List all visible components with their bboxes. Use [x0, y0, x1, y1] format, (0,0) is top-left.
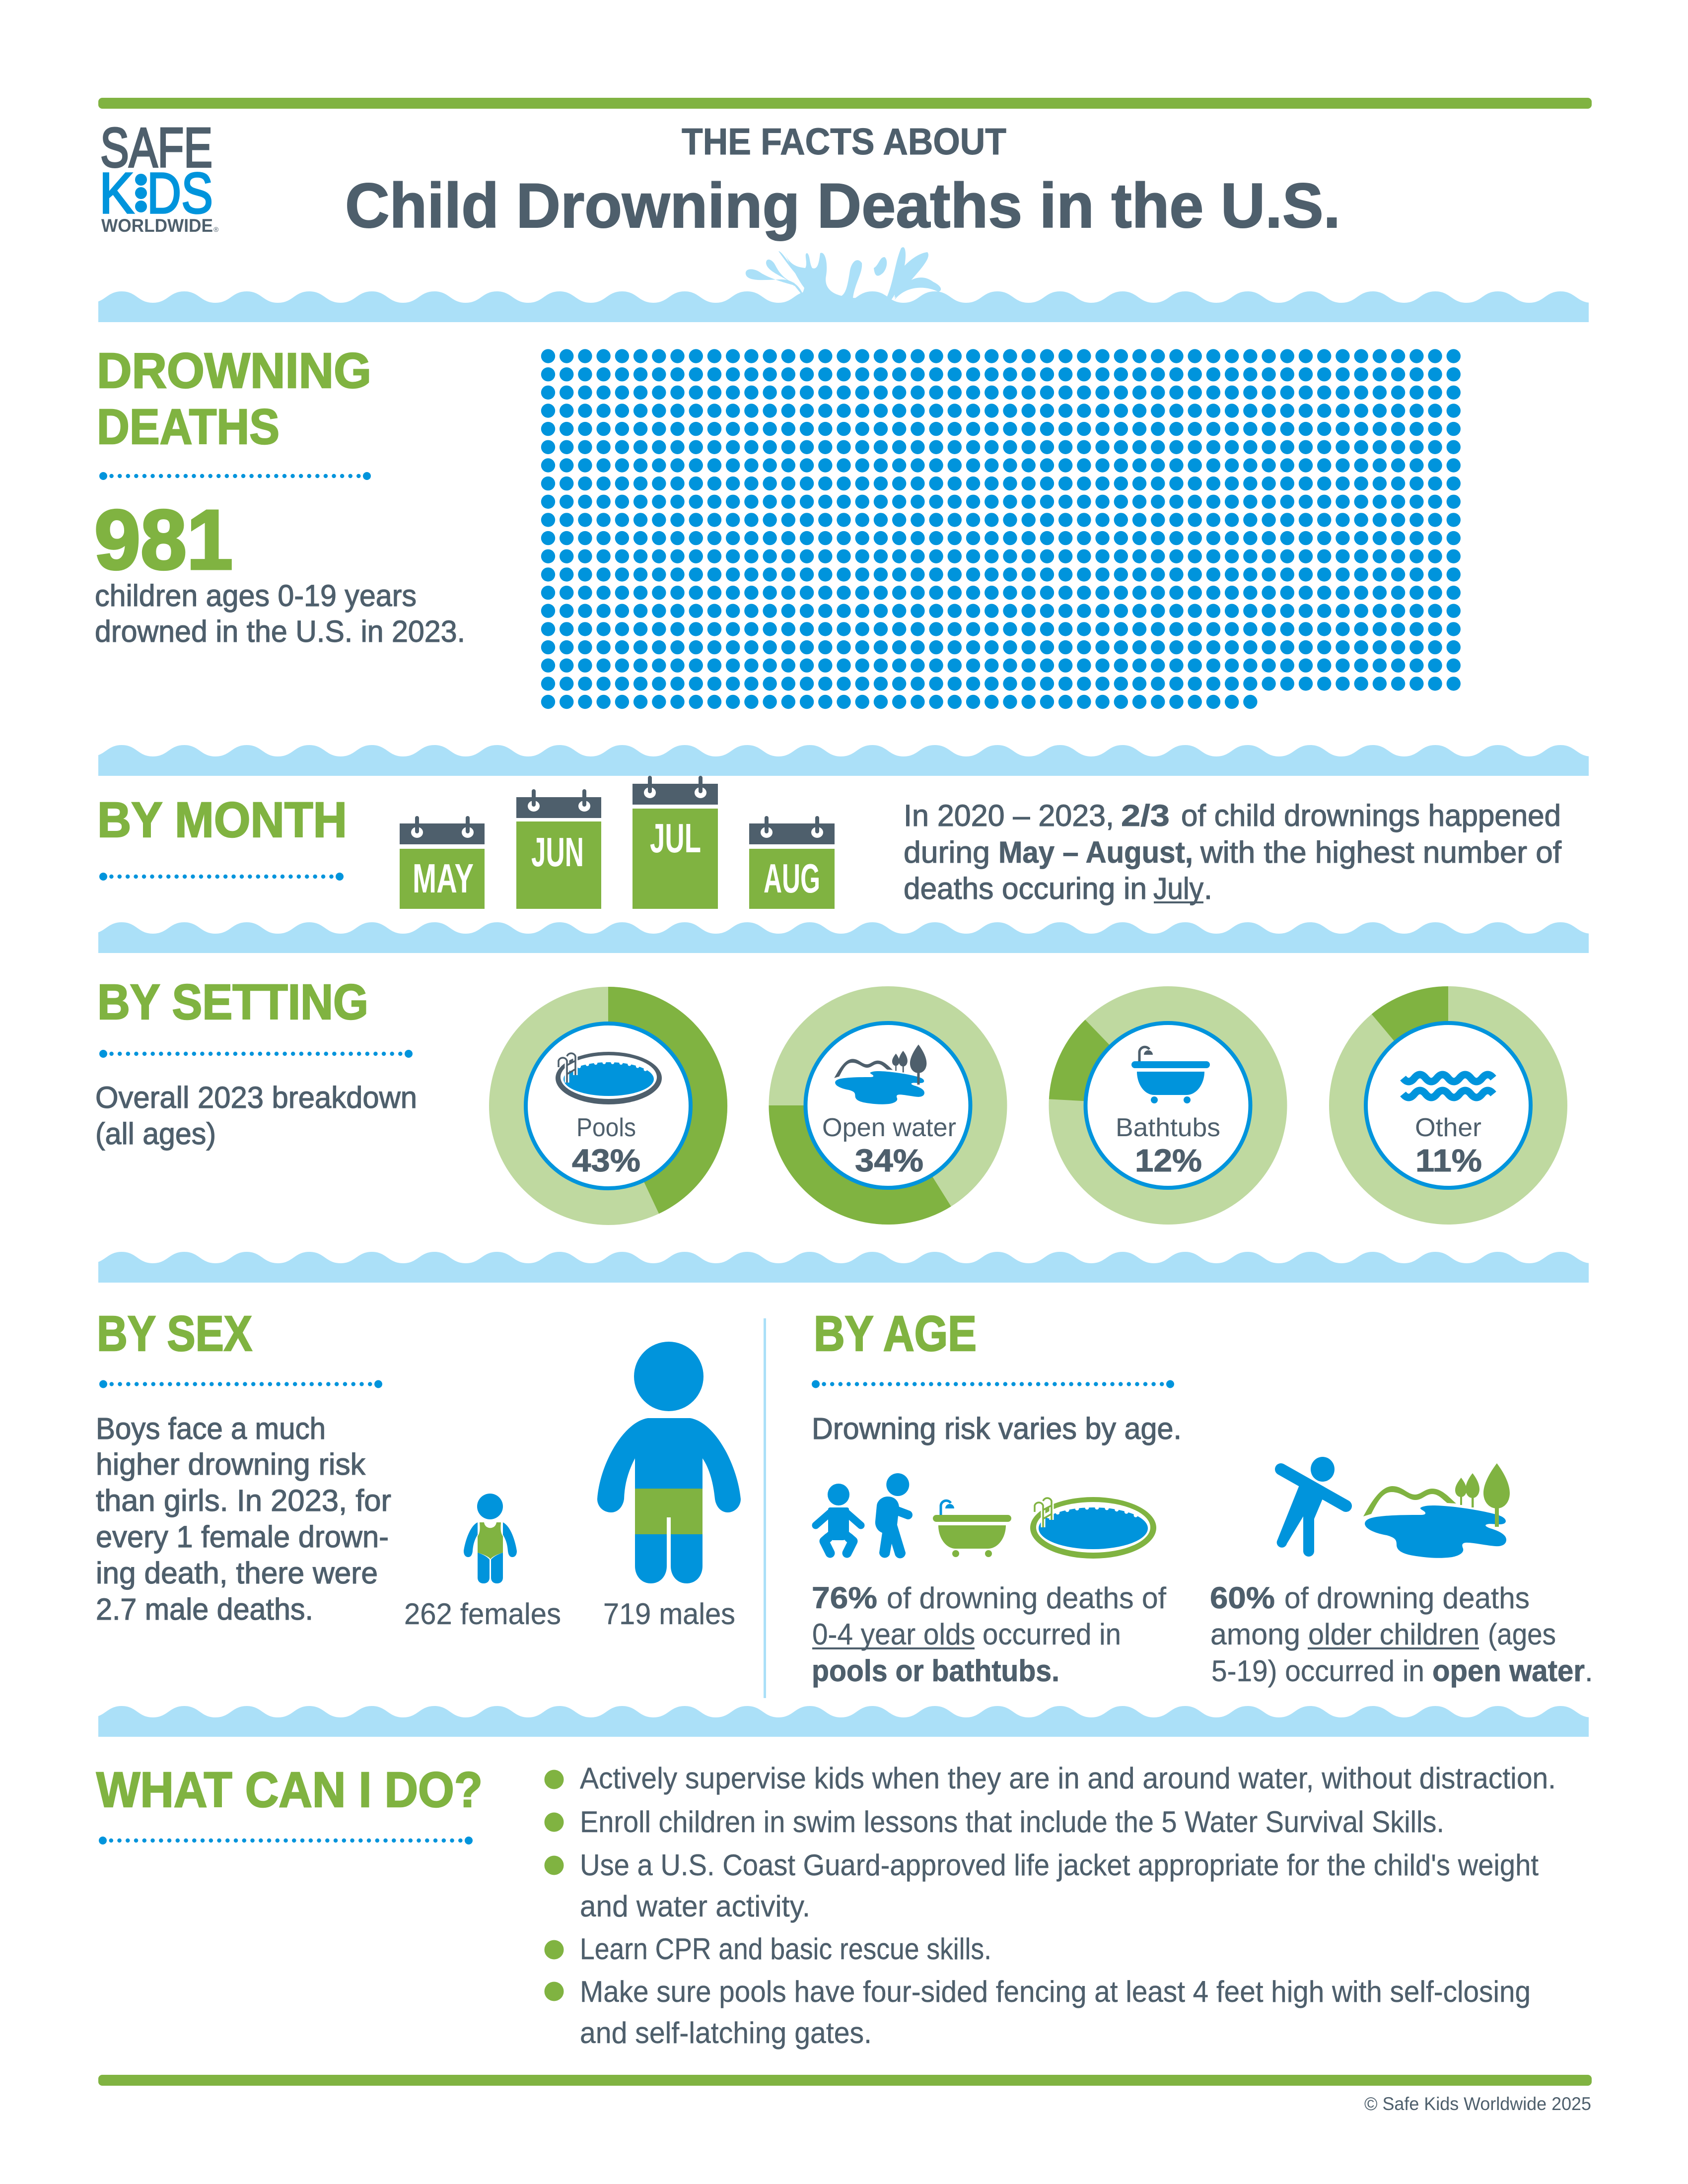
heading: by month: BY MONTH: [97, 792, 347, 848]
logo: Safe Kids Worldwide: SAFE: [100, 117, 212, 179]
donut: bathtubs 12%: [1066, 1004, 1269, 1207]
bullet: life jacket: [544, 1848, 1539, 1923]
donut: other 11%: Other: [1415, 1113, 1481, 1142]
text: boys vs girls risk: every 1 female drown-: [96, 1520, 389, 1554]
heading: drowning deaths: DROWNING: [97, 343, 371, 399]
text: 60% of drowning deaths: .: [1585, 1654, 1593, 1688]
donut: other 11%: 11%: [1415, 1143, 1482, 1178]
calendar: June: JUN: [531, 829, 584, 875]
text: 76% of drowning deaths: of drowning deaths of: [887, 1581, 1166, 1615]
label: female count: 262 females: [404, 1597, 561, 1631]
donut: pools 43%: [507, 1005, 709, 1207]
donut: open water 34%: 34%: [855, 1143, 923, 1178]
bullet: swim lessons: Enroll children in swim lessons that include the 5 Water Survival Skills.: [580, 1805, 1444, 1839]
heading: drowning deaths: DEATHS: [97, 399, 280, 455]
text: monthly finding: In 2020 – 2023,: [904, 799, 1114, 832]
text: boys vs girls risk: higher drowning risk: [96, 1447, 365, 1481]
text: boys vs girls risk: than girls. In 2023, for: [96, 1484, 391, 1517]
text: monthly finding: deaths occuring in: [904, 872, 1147, 905]
text: monthly finding: of child drownings happened: [1181, 799, 1561, 832]
text: 76% of drowning deaths: 0-4 year olds: [812, 1618, 975, 1651]
donut: pools 43%: 43%: [572, 1143, 640, 1178]
wave divider 2: [90, 745, 1654, 776]
label: male count: 719 males: [603, 1597, 735, 1631]
text: boys vs girls risk: 2.7 male deaths.: [96, 1592, 313, 1626]
icon: baby and toddler: [816, 1473, 909, 1558]
icon: male figure: [597, 1342, 741, 1583]
icon: lake with hills and trees: [1363, 1463, 1510, 1558]
dotted divider: drowning deaths: [99, 472, 371, 480]
text: 60% of drowning deaths: 5-19) occurred in: [1211, 1654, 1424, 1688]
donut: other 11%: [1347, 1004, 1549, 1207]
heading: by setting: BY SETTING: [97, 974, 368, 1030]
text: monthly finding: with the highest number of: [1200, 835, 1562, 869]
dotted divider: what can I do: [99, 1837, 473, 1844]
stat: 981 children: 981: [94, 493, 233, 587]
text: 60% of drowning deaths: (ages: [1488, 1618, 1556, 1651]
logo: Safe Kids Worldwide: ®: [213, 225, 219, 233]
logo: Safe Kids Worldwide: [99, 117, 219, 236]
icon: green bathtub: [933, 1501, 1011, 1557]
text: boys vs girls risk: ing death, there were: [96, 1556, 378, 1590]
calendar: July: JUL: [650, 815, 701, 861]
icon: female figure: [464, 1494, 517, 1583]
top green rule: [98, 98, 1592, 109]
donut: bathtubs 12%: Bathtubs: [1116, 1113, 1220, 1142]
text: 60% of drowning deaths: open water: [1432, 1654, 1585, 1688]
dot grid: one dot per death: [548, 356, 1454, 702]
list: safety actions: [544, 1762, 1556, 2049]
icon: green pool: [1030, 1497, 1156, 1559]
dotted divider: by setting: [99, 1050, 413, 1058]
heading: by age: BY AGE: [814, 1306, 977, 1362]
text: boys vs girls risk: Boys face a much: [96, 1412, 326, 1445]
text: monthly finding: May – August,: [998, 835, 1193, 869]
text: monthly finding: 2/3: [1121, 799, 1170, 832]
title block: THE FACTS ABOUT: [682, 121, 1006, 162]
text: overall breakdown: [95, 1081, 417, 1151]
bullet: life jacket: Use a U.S. Coast Guard-approved life jacket appropriate for the child's weight: [580, 1848, 1539, 1882]
wave divider 3: [90, 922, 1654, 953]
title block: Child Drowning Deaths in the U.S.: [345, 170, 1340, 241]
icon: bathtub: [1131, 1047, 1210, 1103]
footer copyright: © Safe Kids Worldwide 2025: [1364, 2094, 1591, 2114]
donut: bathtubs 12%: 12%: [1135, 1143, 1202, 1178]
text: 76% of drowning deaths: pools or bathtubs.: [812, 1654, 1059, 1688]
text: overall breakdown: Overall 2023 breakdown: [95, 1081, 417, 1114]
donut: open water 34%: [786, 1004, 989, 1207]
dotted divider: by month: [99, 873, 344, 881]
wave divider 5: [90, 1706, 1654, 1737]
bottom green rule: [98, 2075, 1592, 2086]
text: 76% of drowning deaths: 76%: [812, 1581, 877, 1615]
heading: by sex: BY SEX: [97, 1306, 252, 1362]
text: 60% of drowning deaths: among: [1210, 1618, 1300, 1651]
bullet: fencing: and self-latching gates.: [580, 2016, 872, 2049]
logo: Safe Kids Worldwide: DS: [147, 161, 213, 225]
donut: pools 43%: Pools: [576, 1113, 636, 1142]
calendar: July: [633, 776, 718, 909]
text: monthly finding: July: [1153, 872, 1203, 905]
calendar: June: [516, 789, 601, 909]
text: 76% of drowning deaths: occurred in: [983, 1618, 1121, 1651]
text: boys vs girls risk: [96, 1412, 391, 1626]
bullet: CPR: Learn CPR and basic rescue skills.: [580, 1932, 991, 1966]
icon: jumping child: [1277, 1457, 1346, 1557]
heading: what can I do: WHAT CAN I DO?: [96, 1762, 483, 1818]
text: overall breakdown: (all ages): [95, 1117, 216, 1151]
dotted divider: by age: [812, 1380, 1174, 1388]
bullet: supervise: Actively supervise kids when they are in and around water, without distraction.: [580, 1762, 1556, 1795]
text: monthly finding: during: [904, 835, 990, 869]
text: 60% of drowning deaths: 60%: [1210, 1581, 1275, 1615]
text: 60% of drowning deaths: of drowning deaths: [1284, 1581, 1530, 1615]
icon: water splash: [746, 247, 941, 304]
icon: pool: [556, 1052, 662, 1104]
icon: open water: [834, 1044, 926, 1104]
heading: drowning deaths: [97, 343, 371, 455]
dotted divider: by sex: [99, 1380, 382, 1388]
calendar: August: [749, 816, 835, 909]
vertical divider between sex and age: [764, 1318, 766, 1698]
text: 76% of drowning deaths: [812, 1581, 1166, 1688]
bullet: fencing: [544, 1975, 1531, 2049]
icon: water waves: [1403, 1075, 1493, 1097]
bullet: fencing: Make sure pools have four-sided fencing at least 4 feet high with self-closing: [580, 1975, 1531, 2008]
title block: [345, 121, 1340, 241]
stat: 981 children: [94, 493, 465, 648]
text: monthly finding: [904, 799, 1562, 905]
calendar: May: MAY: [413, 855, 474, 901]
calendar: May: [400, 816, 485, 909]
text: 60% of drowning deaths: [1210, 1581, 1593, 1688]
wave divider 1: [90, 291, 1654, 322]
bullet: life jacket: and water activity.: [580, 1890, 810, 1923]
stat: 981 children: drowned in the U.S. in 2023.: [95, 614, 465, 648]
text: risk varies by age: Drowning risk varies by age.: [812, 1412, 1182, 1445]
stat: 981 children: children ages 0-19 years: [95, 579, 417, 613]
text: 60% of drowning deaths: older children: [1308, 1618, 1479, 1651]
wave divider 4: [90, 1252, 1654, 1283]
donut: open water 34%: Open water: [822, 1113, 956, 1142]
logo: Safe Kids Worldwide: K: [99, 161, 134, 225]
text: monthly finding: .: [1204, 872, 1212, 905]
logo: Safe Kids Worldwide: WORLDWIDE: [101, 215, 213, 236]
calendar: August: AUG: [764, 855, 820, 901]
